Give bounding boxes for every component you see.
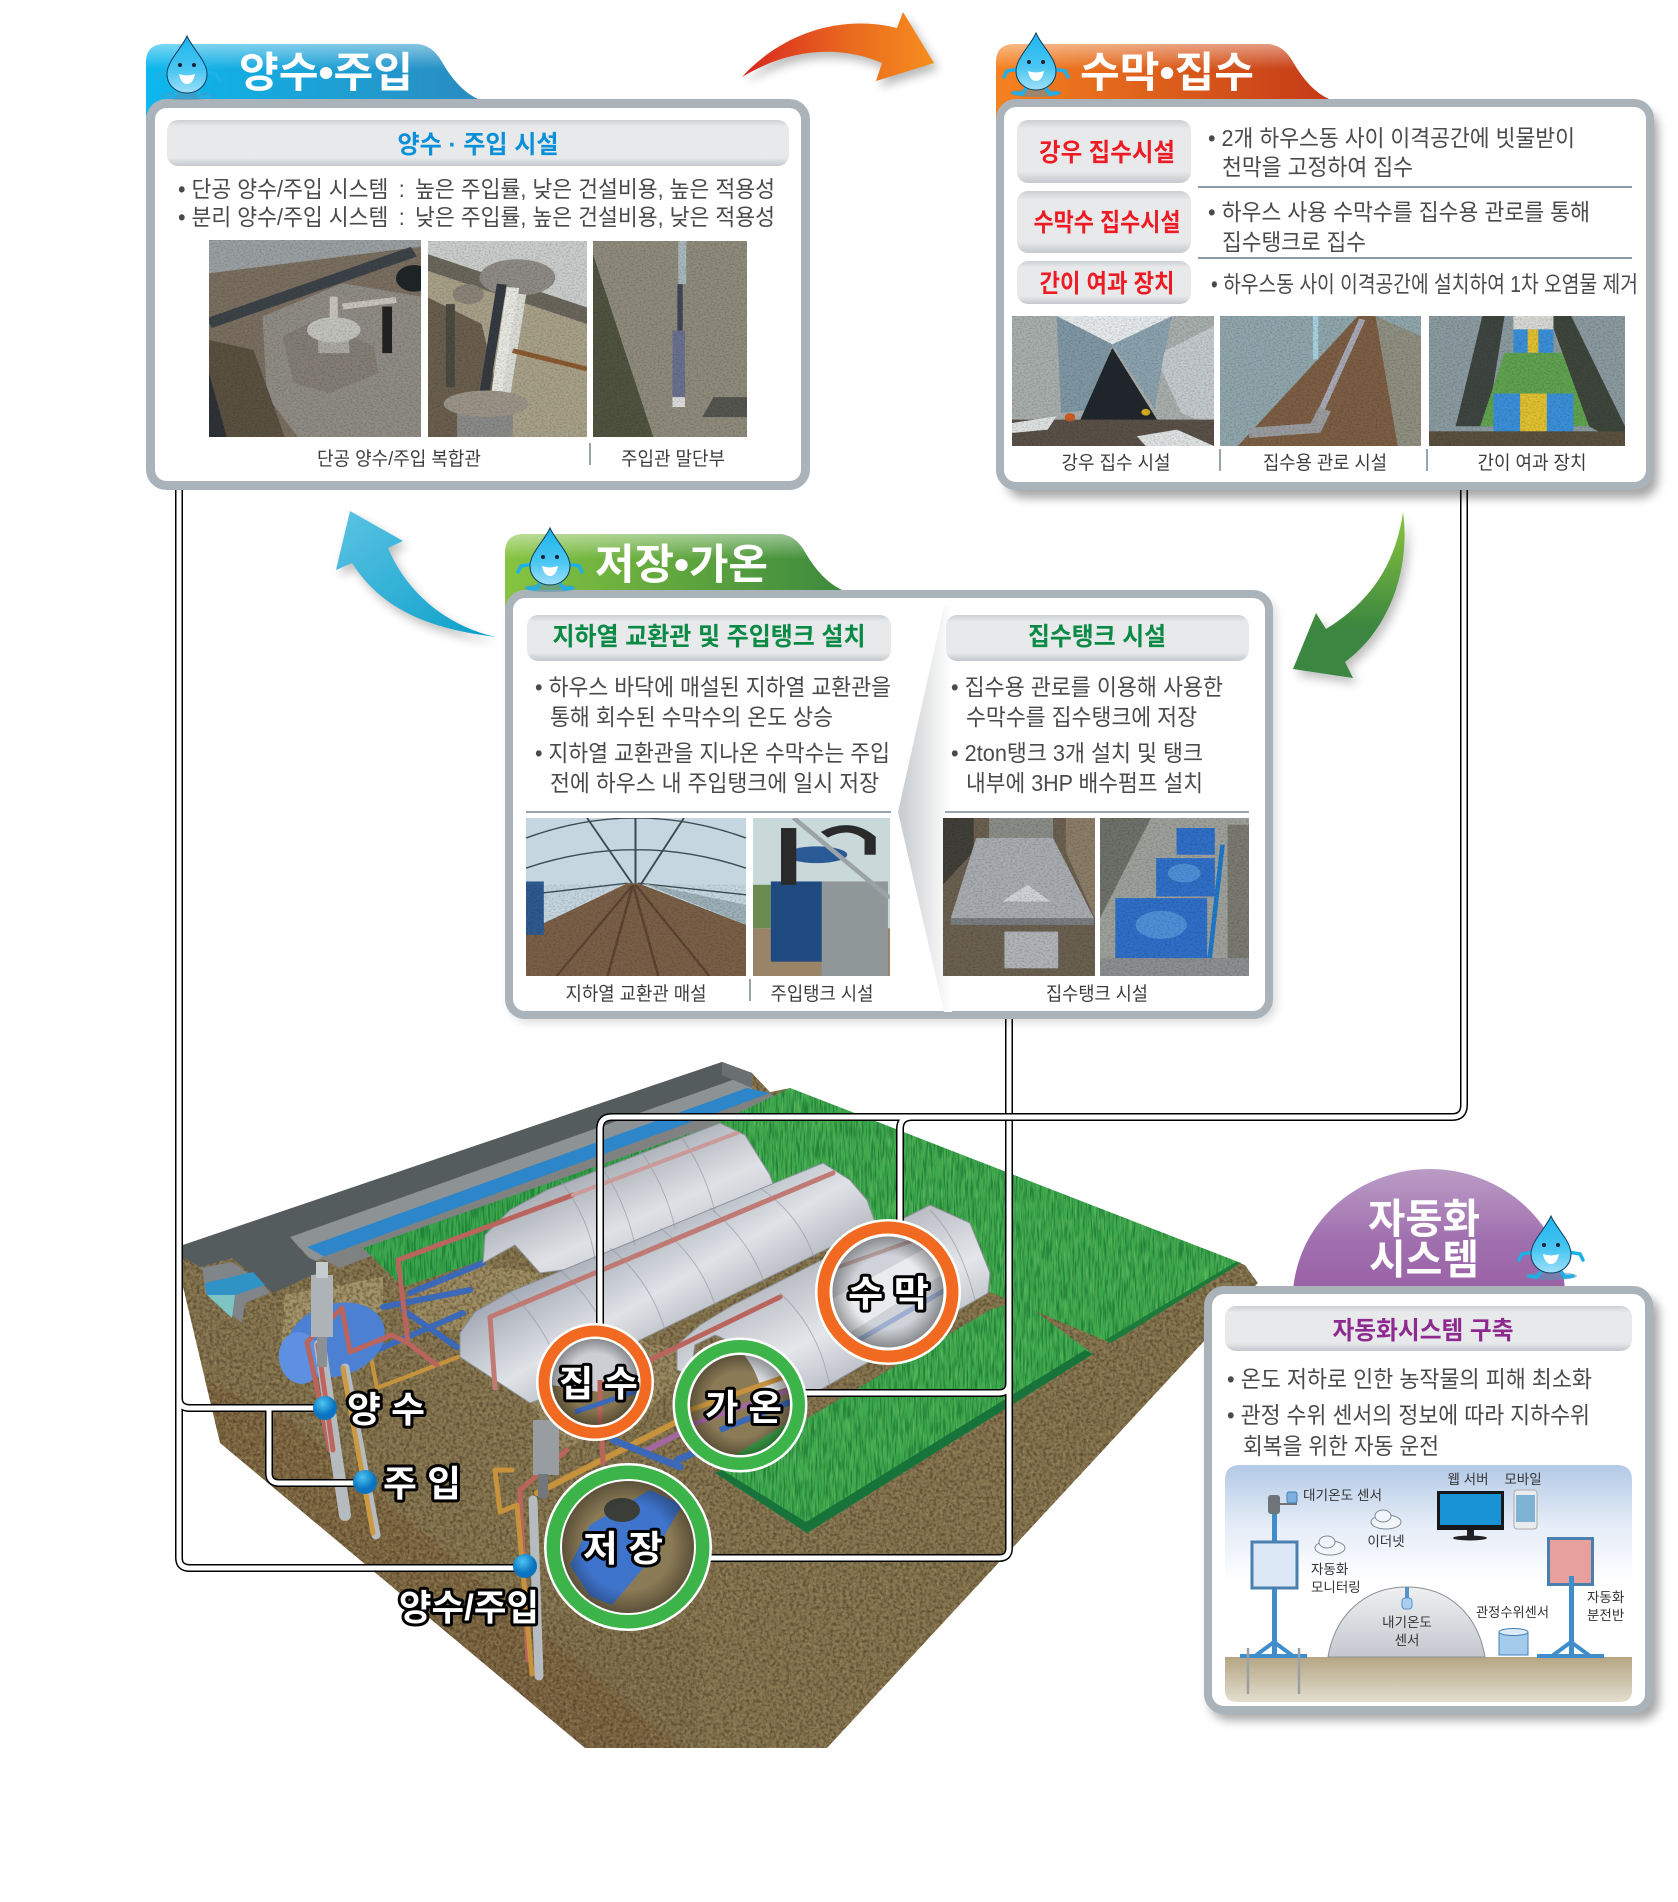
label: 관정수위센서 (1476, 1605, 1549, 1620)
caption: 간이 여과 장치 (1478, 452, 1586, 474)
cloud: ethernet: 이더넷 (1367, 1534, 1405, 1549)
circle callout: water curtain: 수 막 (848, 1273, 929, 1314)
system diagram (1225, 1465, 1632, 1702)
sub heading bar: geothermal (527, 615, 891, 661)
panel: storage and warming (505, 528, 1276, 1022)
photo: blue tanks (1100, 818, 1249, 976)
grass field in front (715, 1300, 1095, 1535)
body text: geothermal: 통해 회수된 수막수의 온도 상승 (550, 704, 833, 730)
body text: collection tank (951, 674, 1223, 796)
panel: intake and injection (146, 36, 806, 486)
connector line: rain curtain panel to collection circles (600, 490, 1464, 1330)
label: simple filter (1017, 261, 1191, 304)
underground pipes (343, 1263, 790, 1493)
red and gold pipe runs (307, 1133, 833, 1676)
body text (1198, 125, 1638, 297)
dot: intake and injection point (513, 1554, 537, 1578)
arrow: red to orange, from intake panel to rain curtain panel (742, 12, 938, 87)
label: curtain water collection: 수막수 집수시설 (1034, 209, 1180, 237)
body text: collection tank: • 2ton탱크 3개 설치 및 탱크 (951, 740, 1203, 766)
concrete channel wall (183, 1062, 780, 1323)
greenhouse dome: 내기온도 (1382, 1615, 1432, 1630)
body text: 집수탱크로 집수 (1222, 229, 1366, 255)
greenhouse dome: 센서 (1395, 1633, 1419, 1648)
section tab (505, 534, 842, 620)
sub heading bar: 양수 · 주입 시설 (398, 131, 558, 159)
dome heading: 자동화 (1368, 1196, 1480, 1242)
well head centre (533, 1420, 559, 1498)
cloud: ethernet (1367, 1510, 1405, 1549)
label: 모바일 (1504, 1472, 1542, 1487)
circle callout: storage (544, 1463, 712, 1631)
photo: injection tank (753, 818, 890, 976)
caption: 주입탱크 시설 (770, 983, 874, 1005)
body text: 회복을 위한 자동 운전 (1243, 1433, 1439, 1459)
well sensor (1499, 1628, 1528, 1655)
label: 자동화 (1587, 1590, 1624, 1605)
soil block (180, 1060, 1260, 1750)
circle callout: collection: 집 수 (559, 1363, 638, 1404)
arrow: green, from rain curtain panel to storage panel (1293, 512, 1409, 684)
panel shadow (1006, 110, 1658, 498)
photo: simple filter device (1429, 316, 1625, 446)
photo: rainfall collection (1012, 316, 1214, 446)
caption: 지하열 교환관 매설 (566, 983, 706, 1005)
section tab (996, 44, 1329, 130)
label: intake and injection: 양수/주입 (399, 1587, 539, 1628)
dome heading: 시스템 (1369, 1237, 1479, 1283)
circle callout: warming (672, 1338, 808, 1472)
body text: • 온도 저하로 인한 농작물의 피해 최소화 (1227, 1366, 1592, 1392)
label: simple filter: 간이 여과 장치 (1040, 270, 1174, 298)
label: intake: 양 수 (347, 1389, 425, 1430)
grass strip along channel (360, 1130, 705, 1290)
body text: • 분리 양수/주입 시스템 : 낮은 주입률, 높은 건설비용, 낮은 적용성 (178, 204, 775, 230)
label: 대기온도 센서 (1303, 1488, 1382, 1503)
body text: geothermal: • 하우스 바닥에 매설된 지하열 교환관을 (535, 674, 891, 700)
icon: water drop mascot (1519, 1216, 1583, 1280)
label: injection: 주 입 (383, 1463, 461, 1504)
dot: intake point (313, 1396, 337, 1420)
sub heading bar: collection tank (946, 615, 1249, 661)
cloud: monitoring: 자동화 (1311, 1562, 1348, 1577)
panel frame (150, 104, 806, 486)
panel: automation system (1208, 1169, 1659, 1720)
circle callout: warming: 가 온 (705, 1387, 782, 1428)
cloud: monitoring: 모니터링 (1311, 1580, 1361, 1595)
body text: • 관정 수위 센서의 정보에 따라 지하수위 (1227, 1402, 1590, 1428)
icon: phone (1514, 1490, 1537, 1529)
label: rainfall collection (1017, 120, 1191, 183)
panel frame (509, 594, 1269, 1015)
sub heading bar: geothermal: 지하열 교환관 및 주입탱크 설치 (552, 623, 866, 651)
body text: • 단공 양수/주입 시스템 : 높은 주입률, 낮은 건설비용, 높은 적용성 (178, 176, 775, 202)
caption: 집수탱크 시설 (1046, 983, 1148, 1005)
body text (1227, 1366, 1592, 1459)
caption: 단공 양수/주입 복합관 (317, 448, 481, 470)
heading: 저장•가온 (595, 541, 768, 588)
panel frame (1000, 103, 1650, 486)
panel: curtain and collection (996, 33, 1658, 498)
body text: collection tank: 수막수를 집수탱크에 저장 (966, 704, 1197, 730)
cloud: monitoring (1311, 1536, 1361, 1595)
caption: 강우 집수 시설 (1062, 452, 1170, 474)
icon: water drop mascot (155, 36, 219, 100)
sub heading bar (167, 120, 789, 166)
icon: monitor (1437, 1491, 1504, 1540)
greenhouse dome (1328, 1587, 1485, 1657)
label (1587, 1590, 1624, 1623)
photo: drain pipe (1220, 316, 1421, 446)
photo: injection pipe end (593, 241, 747, 437)
photo: single well head (209, 240, 421, 437)
connector line: intake panel to terrain dots (179, 490, 515, 1568)
heading: 수막•집수 (1080, 49, 1254, 96)
panel shadow (1210, 1296, 1659, 1720)
divider chevron (898, 606, 952, 1012)
body text: geothermal (535, 674, 891, 796)
icon: water drop mascot (1004, 33, 1068, 97)
icon: water drop mascot (518, 528, 582, 592)
panel shadow (510, 598, 1276, 1022)
body text: geothermal: • 지하열 교환관을 지나온 수막수는 주입 (535, 740, 890, 766)
circle callout: storage: 저 장 (583, 1528, 663, 1569)
circle callout: water curtain (815, 1219, 961, 1365)
body text: 천막을 고정하여 집수 (1222, 154, 1413, 180)
greenhouse tunnels (460, 1123, 990, 1403)
dot: injection point (353, 1470, 377, 1494)
body text: • 2개 하우스동 사이 이격공간에 빗물받이 (1208, 125, 1575, 151)
sub heading bar (1225, 1306, 1632, 1351)
caption: 주입관 말단부 (621, 448, 725, 470)
connector line: storage panel to warming and storage circles (700, 1019, 1009, 1558)
body text: • 하우스 사용 수막수를 집수용 관로를 통해 (1208, 199, 1590, 225)
label: 분전반 (1587, 1608, 1624, 1623)
label: rainfall collection: 강우 집수시설 (1039, 139, 1175, 167)
body text: collection tank: 내부에 3HP 배수펌프 설치 (966, 770, 1203, 796)
sub heading bar: 자동화시스템 구축 (1332, 1317, 1514, 1345)
distribution panel (1537, 1538, 1604, 1656)
well head left (311, 1262, 333, 1367)
caption: 집수용 관로 시설 (1263, 452, 1387, 474)
body text: collection tank: • 집수용 관로를 이용해 사용한 (951, 674, 1223, 700)
body text: geothermal: 전에 하우스 내 주입탱크에 일시 저장 (550, 770, 879, 796)
body text (178, 176, 775, 230)
photo: collection tank lid (943, 818, 1095, 976)
label: curtain water collection (1017, 191, 1191, 253)
terrain illustration: greenhouse site cross-section (180, 1060, 1260, 1750)
weather mast (1240, 1492, 1307, 1694)
section tab (146, 44, 478, 130)
blue water tank (275, 1290, 395, 1390)
heading: 양수•주입 (239, 49, 413, 96)
grass field behind greenhouses (709, 1088, 1241, 1343)
label: 웹 서버 (1447, 1472, 1489, 1487)
circle callout: collection (536, 1323, 654, 1441)
photo: geothermal pipe burial (526, 818, 746, 976)
sub heading bar: collection tank: 집수탱크 시설 (1028, 623, 1166, 651)
panel frame (1208, 1290, 1649, 1710)
photo: composite pipe (428, 241, 587, 437)
dome heading (1293, 1169, 1565, 1290)
arrow: blue, from storage panel to intake panel (336, 511, 500, 643)
